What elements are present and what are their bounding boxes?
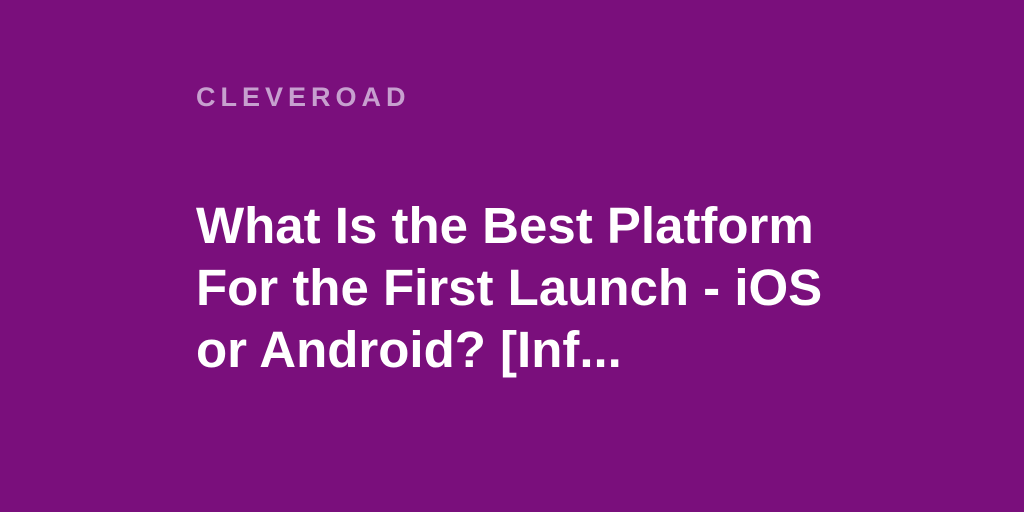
logo: CLEVEROAD: CLEVEROAD [196, 82, 411, 112]
title: or Android? [Inf... [196, 321, 622, 378]
title: For the First Launch - iOS [196, 259, 822, 316]
title: What Is the Best Platform [196, 197, 814, 254]
title [196, 197, 822, 378]
